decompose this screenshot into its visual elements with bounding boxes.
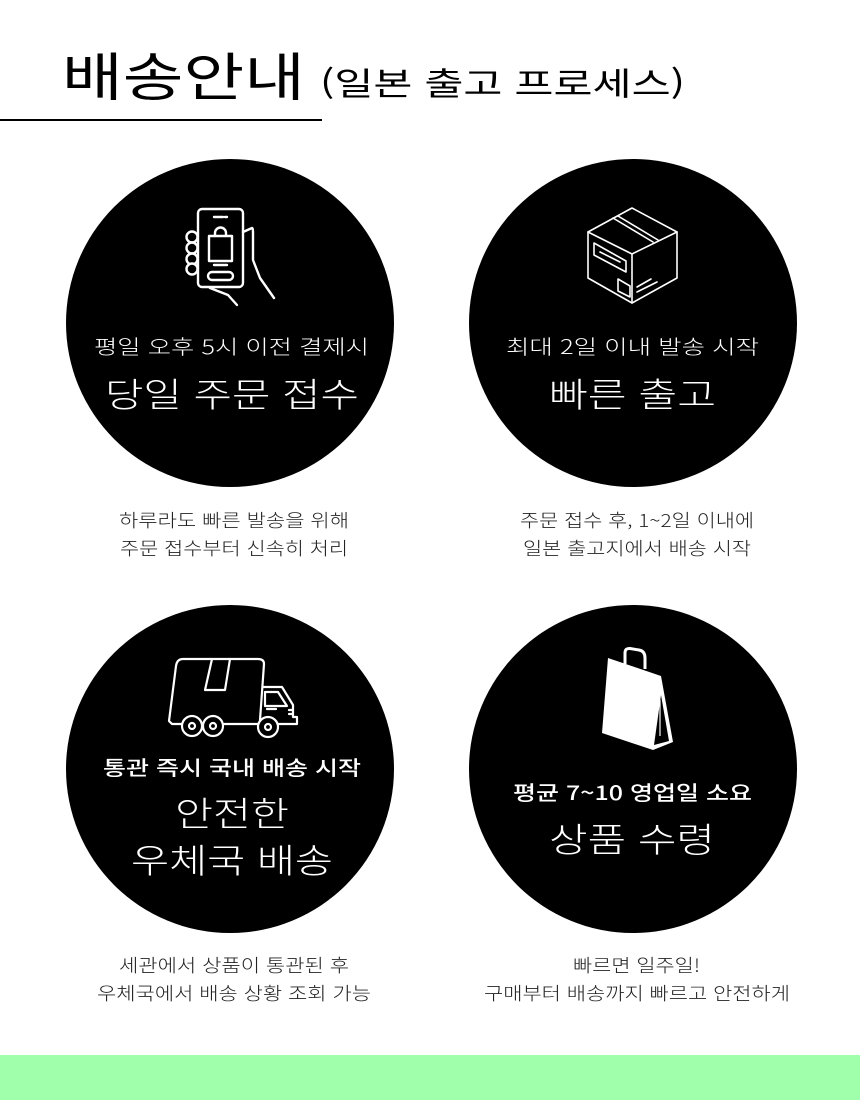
text: post description: 세관에서 상품이 통관된 후 — [119, 952, 349, 978]
title: 배송안내 — [62, 36, 305, 111]
text: arrival description: 빠르면 일주일! — [573, 952, 700, 978]
text: dispatch subheading: 최대 2일 이내 발송 시작 — [506, 331, 759, 360]
text: dispatch description: 주문 접수 후, 1~2일 이내에 — [520, 507, 754, 533]
text: arrival description — [484, 952, 790, 1006]
text: post heading: 우체국 배송 — [131, 834, 333, 883]
icon: shopping bag — [602, 648, 673, 750]
icon: phone shopping — [186, 209, 274, 305]
title underline — [0, 119, 322, 121]
text: post heading — [131, 787, 333, 883]
text: order description: 주문 접수부터 신속히 처리 — [120, 535, 348, 561]
panel: order received — [66, 159, 394, 487]
text: order description — [119, 507, 349, 561]
icon: box — [588, 208, 677, 303]
panel: product arrival — [469, 605, 797, 933]
text: arrival description: 구매부터 배송까지 빠르고 안전하게 — [484, 980, 790, 1006]
footer band — [0, 1055, 860, 1100]
text: order subheading: 평일 오후 5시 이전 결제시 — [94, 331, 369, 360]
text: dispatch description: 일본 출고지에서 배송 시작 — [523, 535, 751, 561]
text: dispatch heading: 빠른 출고 — [549, 368, 716, 417]
text: order heading: 당일 주문 접수 — [105, 368, 359, 417]
panel: fast dispatch — [469, 159, 797, 487]
title — [62, 36, 685, 111]
text: order description: 하루라도 빠른 발송을 위해 — [119, 507, 349, 533]
text: post description: 우체국에서 배송 상황 조회 가능 — [97, 980, 371, 1006]
panel: post delivery — [66, 605, 394, 933]
text: post description — [97, 952, 371, 1006]
title: (일본 출고 프로세스) — [320, 59, 685, 105]
text: arrival heading: 상품 수령 — [549, 813, 715, 862]
icon: truck — [169, 659, 297, 737]
text: arrival subheading: 평균 7~10 영업일 소요 — [513, 777, 752, 806]
text: post heading: 안전한 — [175, 787, 289, 836]
text: dispatch description — [520, 507, 754, 561]
text: post subheading: 통관 즉시 국내 배송 시작 — [103, 752, 361, 781]
